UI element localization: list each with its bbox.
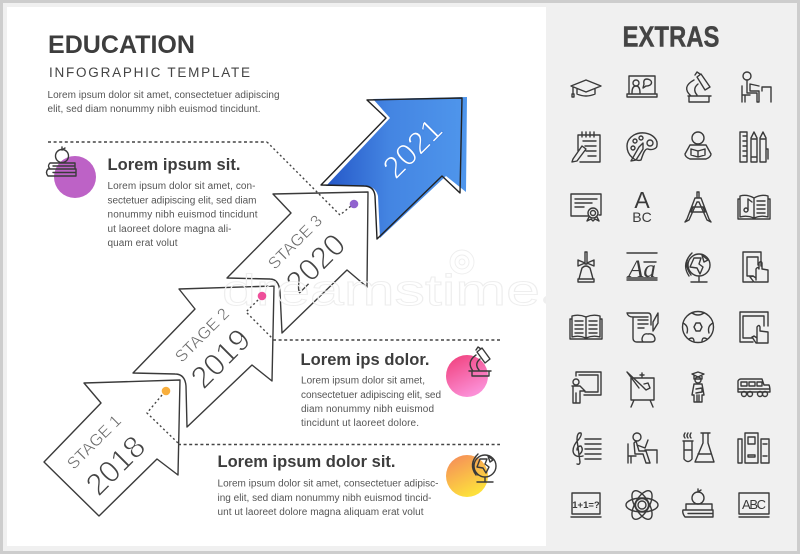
orange circle xyxy=(446,455,488,497)
panel: extras xyxy=(546,7,797,546)
arrow: stage 3 2020: 2020 xyxy=(279,227,352,300)
marker: stage 2 xyxy=(258,292,266,300)
heading: Lorem ipsum sit. xyxy=(108,156,240,174)
intro text: elit, sed diam nonummy nibh euismod tincidunt. xyxy=(48,104,260,115)
title: EDUCATION xyxy=(48,31,195,59)
body: sectetuer adipiscing elit, sed diam xyxy=(108,196,256,206)
arrow: 2021 blue xyxy=(321,97,467,239)
subtitle: INFOGRAPHIC TEMPLATE xyxy=(49,65,250,80)
leader: stage 1 xyxy=(147,395,178,443)
icon: graduation cap xyxy=(571,80,601,97)
icon: seated student xyxy=(742,72,771,102)
arrow: stage 1 2018: STAGE 1 xyxy=(64,412,125,473)
leader line: stage 3 xyxy=(48,141,267,143)
icon: test tube and flask xyxy=(683,433,714,462)
icon: math board xyxy=(571,493,601,517)
block: stage 2 text xyxy=(300,347,491,429)
arrow: stage 3 2020 xyxy=(227,192,368,333)
intro text: Lorem ipsum dolor sit amet, consectetuer adipiscing xyxy=(48,90,280,101)
purple circle xyxy=(54,156,96,198)
body: ut laoreet dolore magna ali- xyxy=(108,224,232,235)
arrow: stage 2 2019 xyxy=(133,286,274,427)
body xyxy=(108,181,258,249)
icon: certificate xyxy=(571,194,601,221)
body xyxy=(218,478,438,518)
arrow: stage 2 2019: 2019 xyxy=(184,322,257,395)
icon: atom xyxy=(626,488,658,522)
body: tincidunt ut laoreet dolore. xyxy=(301,418,419,429)
body: nonummy nibh euismod tincidunt xyxy=(108,210,258,220)
icon: palette xyxy=(627,133,657,161)
icon: graduate xyxy=(692,372,704,402)
icon: microscope xyxy=(469,347,491,376)
icon: compass xyxy=(685,192,711,222)
watermark xyxy=(222,250,550,315)
icon: globe xyxy=(686,253,710,282)
icon: reader xyxy=(685,132,711,159)
leader: stage 1 horizontal xyxy=(178,444,500,446)
icon: book row xyxy=(738,433,769,463)
icon: laptop xyxy=(627,76,657,97)
icon: notepad xyxy=(572,132,600,162)
body: consectetuer adipiscing elit, sed xyxy=(301,390,441,401)
body: quam erat volut xyxy=(108,238,178,249)
watermark: dreamstime xyxy=(222,266,540,315)
body: Lorem ipsum dolor sit amet, con- xyxy=(108,181,256,192)
body: diam nonummy nibh euismod xyxy=(301,404,434,415)
extras heading: EXTRAS xyxy=(622,22,720,54)
icon: books with apple xyxy=(683,489,713,517)
arrow: stage 1 2018 xyxy=(44,380,180,516)
icon: cursive letters: Aa xyxy=(626,256,656,283)
body: unt ut laoreet dolore magna aliquam erat volut xyxy=(218,507,424,518)
marker: stage 1 xyxy=(162,387,170,395)
arrow: 2021 blue: 2021 xyxy=(376,112,449,185)
marker: stage 3 xyxy=(350,200,358,208)
icon: student writing xyxy=(628,433,657,463)
icon: math board: 1+1=? xyxy=(572,500,600,511)
icon: letters ABC: BC xyxy=(632,209,652,225)
intro text xyxy=(48,90,280,115)
icon: easel and brush xyxy=(627,372,654,407)
heading: Lorem ipsum dolor sit. xyxy=(218,453,396,471)
body: Lorem ipsum dolor sit amet, xyxy=(301,376,425,386)
icon: letters ABC xyxy=(632,187,652,225)
icon: open book xyxy=(570,315,602,339)
body: Lorem ipsum dolor sit amet, consectetuer adipisc- xyxy=(218,478,438,490)
leader line: stage 3 diagonal xyxy=(267,142,351,215)
icon: globe xyxy=(472,454,496,482)
pink circle xyxy=(446,355,488,397)
icon: books with apple xyxy=(46,147,76,176)
arrow: stage 3 2020: STAGE 3 xyxy=(265,212,326,273)
icon: tablet touch xyxy=(740,312,768,343)
block: stage 3 text xyxy=(46,147,258,249)
icon: teacher at board xyxy=(572,372,601,403)
arrow: stage 2 2019: STAGE 2 xyxy=(172,305,233,366)
icon: phone touch xyxy=(743,252,768,282)
icon: soccer ball xyxy=(682,312,714,342)
body xyxy=(301,376,441,429)
leader: stage 2 xyxy=(246,300,273,339)
arrow: stage 1 2018: 2018 xyxy=(79,429,152,502)
icon: ABC board: ABC xyxy=(742,497,766,512)
icon: scroll and quill xyxy=(627,313,658,342)
icon: music book xyxy=(738,195,770,219)
block: stage 1 text xyxy=(218,453,496,518)
icon: microscope xyxy=(687,72,711,102)
icon: ABC board xyxy=(739,493,769,517)
icon: school bus xyxy=(738,379,770,396)
heading: Lorem ips dolor. xyxy=(300,351,430,369)
panel: main infographic xyxy=(7,7,546,546)
body: ing elit, sed diam nonummy nibh euismod tincid- xyxy=(218,493,432,504)
icon: ruler and pencils xyxy=(740,132,768,162)
icon: letters ABC: A xyxy=(634,187,650,213)
leader: stage 2 horizontal xyxy=(273,339,500,341)
icon: treble clef xyxy=(573,433,601,464)
icon: bell xyxy=(578,252,594,282)
